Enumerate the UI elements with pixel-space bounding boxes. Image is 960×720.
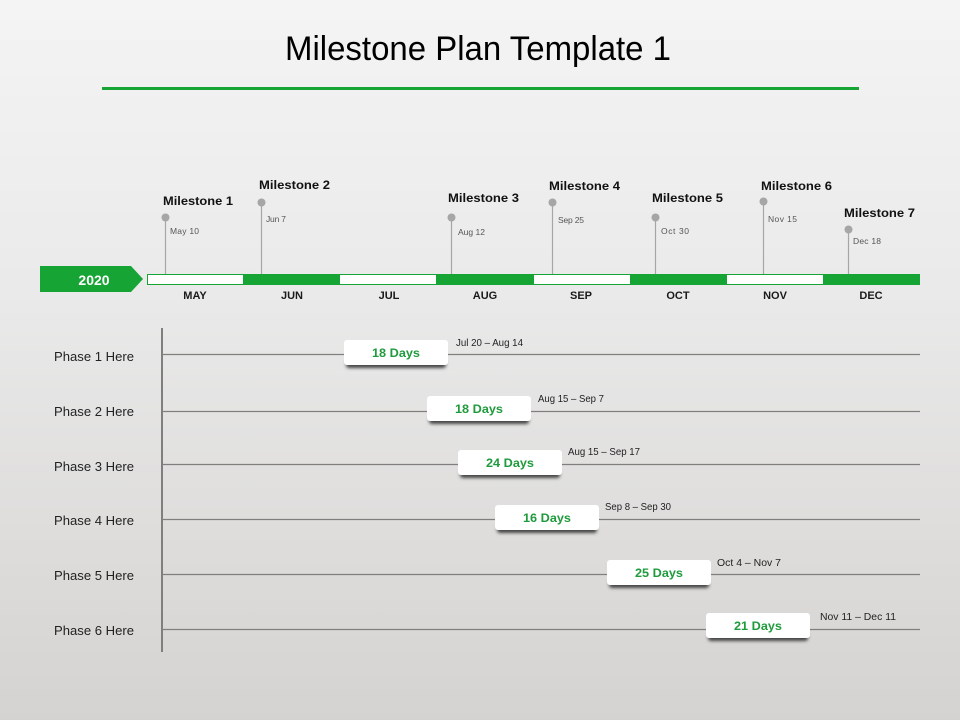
milestone 2: Milestone 2 (259, 178, 330, 192)
milestone 5: Oct 30 (661, 226, 689, 236)
phase 3 row: Aug 15 – Sep 17 (568, 446, 640, 458)
phase 2 row: 18 Days (455, 402, 503, 416)
milestone 6: Nov 15 (768, 214, 797, 224)
month labels: JUN (281, 290, 303, 302)
phase 1 row: Phase 1 Here (54, 349, 134, 364)
milestone 7: Milestone 7 (844, 206, 915, 220)
phase 6 row: Phase 6 Here (54, 623, 134, 638)
year arrow: 2020 (40, 266, 143, 292)
phase axis (161, 328, 163, 652)
phase 3 row: Phase 3 Here (54, 459, 134, 474)
phase 5 row (54, 557, 920, 588)
phase 1 row: 18 Days (372, 346, 420, 360)
milestone 2: Jun 7 (266, 214, 286, 224)
milestone 5: Milestone 5 (652, 191, 723, 205)
milestone 7: Dec 18 (853, 236, 881, 246)
phase 2 row: Aug 15 – Sep 7 (538, 393, 604, 405)
phase 3 row (54, 446, 920, 478)
phase 6 row (54, 611, 920, 641)
milestone 6 (760, 179, 832, 274)
phase 1 row (54, 337, 920, 368)
year arrow: 2020: 2020 (78, 272, 110, 288)
phase 4 row (54, 501, 920, 533)
milestone 5 (652, 191, 723, 274)
phase 2 row: Phase 2 Here (54, 404, 134, 419)
milestone 1: May 10 (170, 226, 199, 236)
milestone 4: Milestone 4 (549, 179, 620, 193)
milestone 3: Milestone 3 (448, 191, 519, 205)
month labels: OCT (666, 290, 690, 302)
phase 1 row: Jul 20 – Aug 14 (456, 337, 523, 349)
milestone 1 (162, 194, 233, 274)
milestone 7 (844, 206, 915, 274)
milestone 4 (548, 179, 620, 274)
phase 2 row (54, 393, 920, 424)
phase 4 row: 16 Days (523, 511, 571, 525)
phase 3 row: 24 Days (486, 456, 534, 470)
milestone 4: Sep 25 (558, 215, 584, 225)
month labels: JUL (379, 290, 400, 302)
phase 5 row: 25 Days (635, 566, 683, 580)
month labels: NOV (763, 290, 788, 302)
timeline: year and months (40, 266, 920, 302)
month labels: MAY (183, 290, 207, 302)
month labels (183, 290, 883, 302)
phase 5 row: Oct 4 – Nov 7 (717, 557, 781, 569)
phase 4 row: Sep 8 – Sep 30 (605, 501, 671, 513)
phase 5 row: Phase 5 Here (54, 568, 134, 583)
phase 6 row: Nov 11 – Dec 11 (820, 611, 896, 623)
milestone 1: Milestone 1 (163, 194, 233, 208)
phase 6 row: 21 Days (734, 619, 782, 633)
month bar (148, 274, 920, 285)
milestone 3 (448, 191, 519, 274)
milestone 2 (258, 178, 330, 274)
month labels: AUG (473, 290, 497, 302)
milestone 3: Aug 12 (458, 227, 485, 237)
month labels: DEC (859, 290, 883, 302)
title: Milestone Plan Template 1 (285, 30, 671, 68)
phase 4 row: Phase 4 Here (54, 513, 134, 528)
month labels: SEP (570, 290, 592, 302)
milestone 6: Milestone 6 (761, 179, 832, 193)
